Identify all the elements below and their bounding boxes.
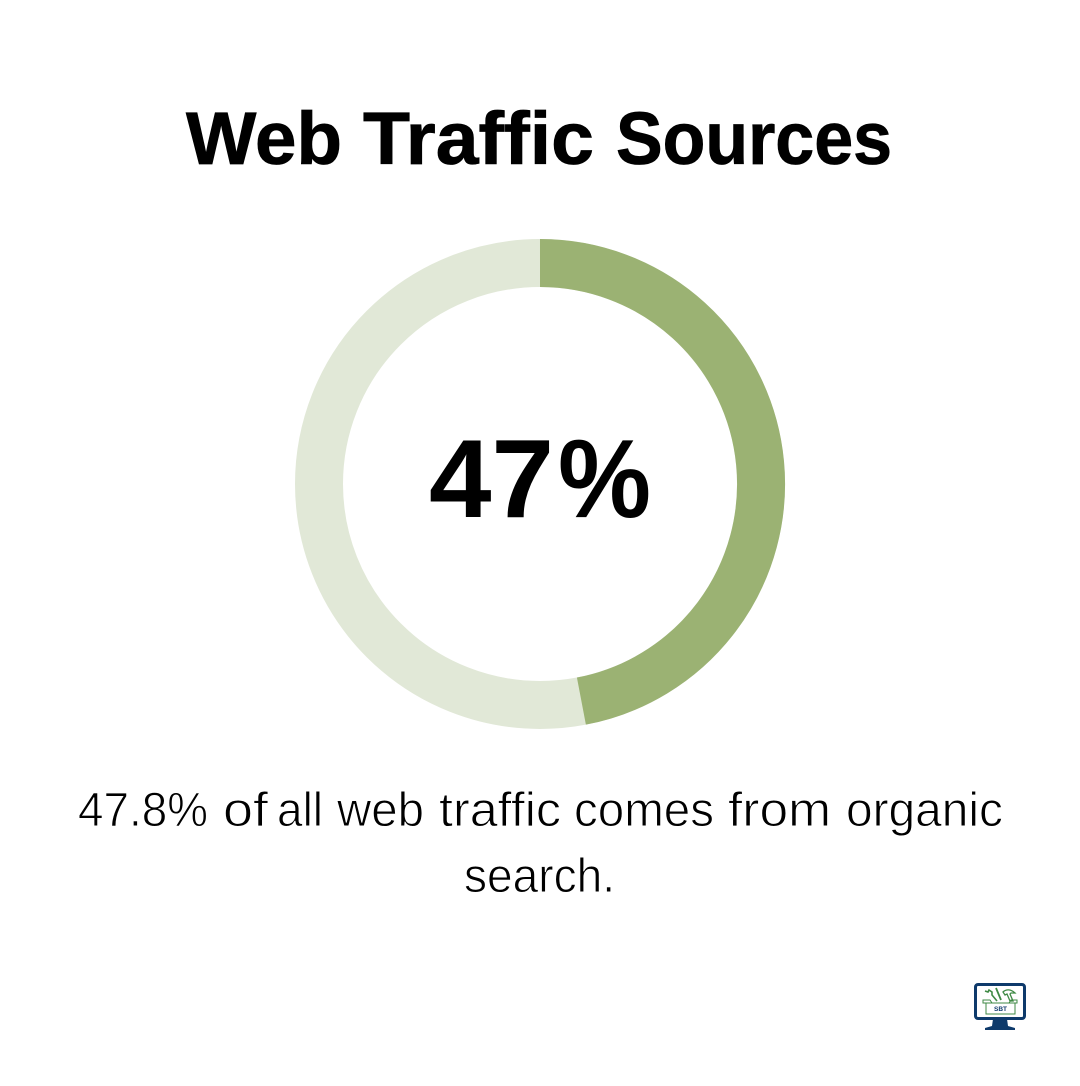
logo text: SBT	[994, 1006, 1007, 1013]
description text: web	[336, 784, 424, 837]
donut value segment: 47%	[540, 263, 761, 701]
title: Web	[186, 97, 342, 180]
donut chart	[319, 263, 761, 705]
center value: 47	[429, 417, 554, 541]
icon: SBT monitor logo	[976, 984, 1024, 1030]
description text: organic	[846, 784, 1003, 837]
description text: all	[277, 784, 323, 837]
toolbox	[983, 1000, 1017, 1014]
hammer	[1003, 990, 1015, 1001]
description text: search.	[464, 850, 615, 903]
description text: 47.8%	[78, 784, 208, 837]
wrench	[985, 990, 997, 1001]
title: Sources	[616, 97, 892, 180]
description text: from	[728, 784, 831, 837]
title	[186, 97, 892, 180]
monitor screen	[976, 984, 1024, 1018]
description text	[78, 784, 1003, 903]
description text: traffic	[439, 784, 561, 837]
center value: %	[558, 417, 651, 541]
description text: comes	[574, 784, 714, 837]
monitor stand	[985, 1019, 1015, 1030]
title: Traffic	[363, 97, 594, 180]
description text: of	[223, 784, 269, 837]
donut track	[319, 263, 761, 705]
screwdriver	[996, 988, 1001, 1000]
center value	[429, 417, 651, 541]
